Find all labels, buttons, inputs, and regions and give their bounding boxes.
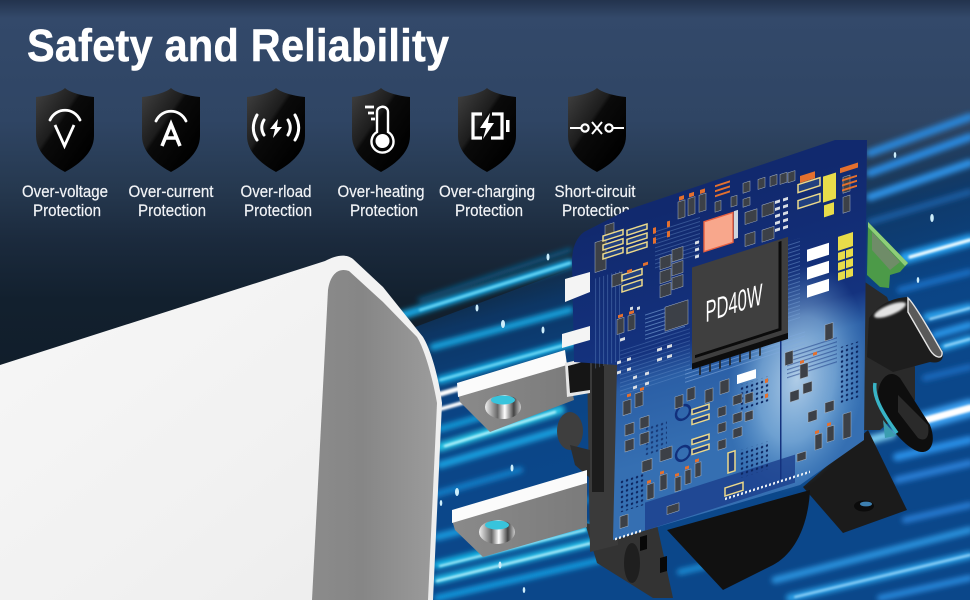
dark components [595, 147, 851, 538]
white pads [737, 243, 829, 384]
charger internals: rear housing [557, 280, 915, 598]
label: protection 1: Protection [33, 202, 101, 220]
PD40W chip [692, 237, 788, 378]
gold component pads [603, 167, 820, 535]
PD40W chip: PD40W [706, 277, 762, 329]
label: over-voltage: Over-voltage [22, 183, 108, 201]
label: protection 3: Protection [244, 202, 312, 220]
icon: short-circuit shield [568, 88, 626, 172]
label: over-heating: Over-heating [338, 183, 424, 201]
label: short-circuit: Short-circuit [554, 183, 636, 201]
second port [875, 374, 933, 452]
icon: over-voltage shield [36, 88, 94, 172]
label: protection 6: Protection [562, 202, 630, 220]
label: protection 5: Protection [455, 202, 523, 220]
icon: over-heating shield [352, 88, 410, 172]
silver strip [734, 210, 738, 239]
knob [557, 412, 583, 450]
left USB pads [562, 272, 590, 348]
circular traces [676, 403, 690, 463]
icon: over-load shield [247, 88, 305, 172]
icon: over-current shield [142, 88, 200, 172]
cylinder [667, 490, 810, 590]
protection labels [22, 183, 636, 220]
icon: over-charging shield [458, 88, 516, 172]
yellow parts [823, 167, 853, 286]
title: Safety and Reliability [27, 21, 449, 71]
black bracket [803, 430, 907, 533]
board overlay [595, 137, 867, 556]
frame channel [592, 362, 604, 492]
sparkles [440, 152, 934, 593]
bottom block [585, 523, 673, 598]
label: over-rload: Over-rload [240, 183, 312, 201]
icon row [36, 88, 626, 172]
white charger body [0, 256, 442, 600]
label: over-current: Over-current [128, 183, 214, 201]
pads on upper parts [617, 197, 788, 395]
rear frame [862, 280, 915, 430]
light streaks [300, 117, 970, 600]
salmon chip [704, 212, 733, 252]
USB-C port [867, 297, 943, 372]
label: protection 4: Protection [350, 202, 418, 220]
orange parts [618, 139, 858, 497]
label: protection 2: Protection [138, 202, 206, 220]
label: over-charging: Over-charging [439, 183, 535, 201]
circuit board [562, 137, 867, 556]
green connector [867, 222, 908, 288]
lower plug prong [452, 470, 587, 557]
left frame strip [587, 355, 618, 552]
bottom edge ticks [725, 472, 810, 499]
upper plug prong [457, 350, 590, 432]
